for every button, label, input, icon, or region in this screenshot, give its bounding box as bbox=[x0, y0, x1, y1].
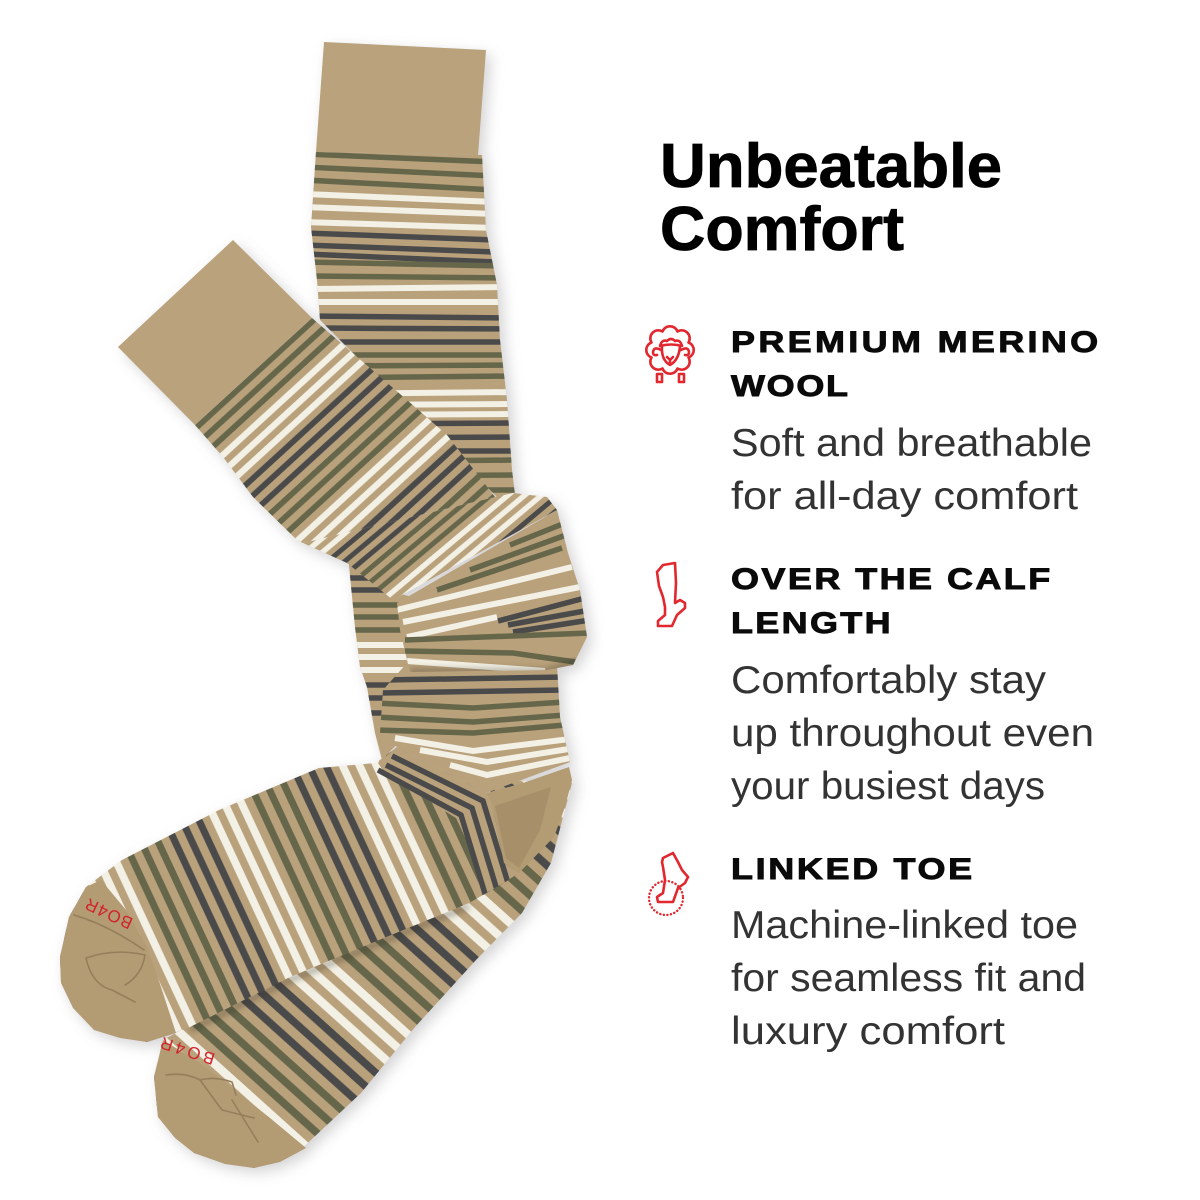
description: for all-day comfort bbox=[731, 475, 1078, 518]
heading bbox=[731, 326, 1098, 403]
feature: premium merino wool bbox=[646, 326, 1098, 518]
heading: LENGTH bbox=[731, 607, 891, 640]
heading bbox=[731, 563, 1050, 640]
sock leg: left strip under fold bbox=[340, 555, 420, 760]
title: Unbeatable bbox=[660, 132, 1002, 201]
description bbox=[731, 422, 1092, 518]
heading: PREMIUM MERINO bbox=[731, 326, 1098, 359]
description bbox=[731, 904, 1086, 1053]
sock foot: lower sock with stripes bbox=[154, 780, 572, 1168]
sock heel bbox=[486, 767, 572, 873]
icon: calf bbox=[657, 563, 685, 626]
description: luxury comfort bbox=[731, 1010, 1005, 1053]
heading: WOOL bbox=[731, 370, 848, 403]
title: Comfort bbox=[660, 195, 904, 264]
sock leg: lower section bbox=[375, 663, 575, 793]
sock fold: lower folded panel bbox=[397, 510, 590, 672]
heading: LINKED TOE bbox=[731, 853, 972, 886]
description: for seamless fit and bbox=[731, 957, 1086, 1000]
sock cuff: top bbox=[316, 42, 486, 155]
description: up throughout even bbox=[731, 712, 1094, 755]
feature: linked toe bbox=[649, 853, 1086, 1053]
sock foot: upper sock with stripes: BO4R bbox=[82, 894, 136, 933]
description: your busiest days bbox=[731, 765, 1045, 808]
description: Comfortably stay bbox=[731, 659, 1047, 702]
description: Machine-linked toe bbox=[731, 904, 1078, 947]
icon: sheep bbox=[646, 326, 694, 382]
sock leg: diagonal section bbox=[195, 318, 495, 543]
sock foot: lower sock with stripes: BO4R bbox=[158, 1033, 217, 1068]
heading: OVER THE CALF bbox=[731, 563, 1050, 596]
icon: foot with toe circle bbox=[649, 853, 688, 915]
sock cuff: diagonal bbox=[118, 240, 312, 425]
description bbox=[731, 659, 1094, 808]
sock foot: upper sock with stripes bbox=[60, 747, 519, 1042]
sock fold: upper folded panel bbox=[303, 493, 557, 600]
sock photo bbox=[60, 42, 590, 1168]
feature: over the calf length bbox=[657, 563, 1094, 808]
sock leg: top vertical section bbox=[305, 152, 520, 500]
description: Soft and breathable bbox=[731, 422, 1092, 465]
title bbox=[660, 132, 1002, 264]
